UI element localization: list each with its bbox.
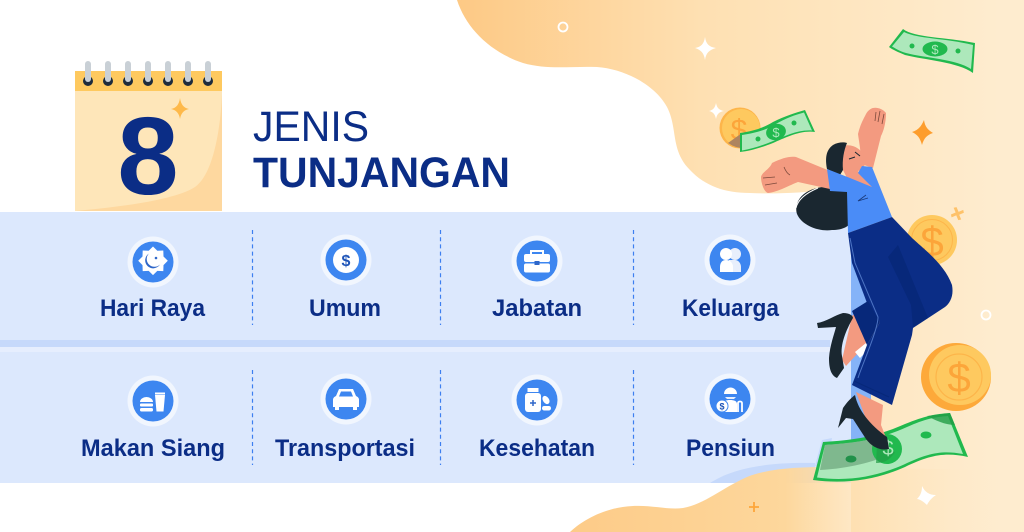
illustration: woman jumping xyxy=(761,108,953,450)
illustration: large coin: $ xyxy=(947,354,971,401)
number 8: 8 xyxy=(117,95,179,218)
item: Makan Siang: Makan Siang xyxy=(81,435,225,462)
front foot xyxy=(856,392,887,440)
white lining xyxy=(855,343,870,358)
illustration: flying bill upper left: $ xyxy=(772,125,780,140)
background blob: top right xyxy=(457,0,1024,532)
rear calf of pants xyxy=(852,301,880,345)
calendar sparkle xyxy=(171,98,189,119)
item: Makan Siang xyxy=(81,376,225,462)
outstretched arm xyxy=(761,157,830,193)
illustration: banknote underfoot xyxy=(813,413,968,482)
item: Pensiun: Pensiun xyxy=(686,435,775,462)
illustration: coin middle right xyxy=(907,215,957,265)
item: Hari Raya xyxy=(100,236,206,322)
seam lines xyxy=(850,238,878,378)
front shoe xyxy=(838,395,889,450)
item: Transportasi: Transportasi xyxy=(275,435,415,462)
item: Umum xyxy=(309,234,381,322)
pocket band xyxy=(888,245,928,327)
illustration: coin upper left: $ xyxy=(731,114,748,147)
decorative rings and sparkles xyxy=(558,22,990,512)
item: Umum: $ xyxy=(342,253,351,270)
item: Hari Raya: Hari Raya xyxy=(100,295,206,322)
title xyxy=(253,103,510,197)
illustration: large coin xyxy=(921,343,991,411)
item: Kesehatan xyxy=(479,374,595,462)
title: JENIS xyxy=(253,103,369,151)
item: Jabatan: Jabatan xyxy=(492,295,582,322)
item: Pensiun: $ xyxy=(719,402,725,412)
item: Keluarga xyxy=(682,234,780,322)
illustration: coin middle right: $ xyxy=(920,218,944,265)
item: Umum: Umum xyxy=(309,295,381,322)
illustration: flying bill upper left xyxy=(740,110,815,152)
dashed dividers xyxy=(252,230,634,465)
pants and front leg xyxy=(848,217,953,405)
item: Pensiun xyxy=(686,374,775,462)
benefits panel xyxy=(0,212,871,483)
hair highlight xyxy=(796,188,818,208)
shirt xyxy=(827,166,892,233)
illustration: flying bill upper right: $ xyxy=(931,42,939,57)
face and neck xyxy=(842,145,873,188)
hair front xyxy=(826,142,847,175)
item: Jabatan xyxy=(492,236,582,322)
outstretched hand lines xyxy=(763,167,790,185)
hem line xyxy=(854,381,889,397)
raised hand fingers xyxy=(875,111,884,124)
rear shoe xyxy=(817,313,853,378)
item: Transportasi xyxy=(275,374,415,462)
illustration: banknote underfoot: $ xyxy=(882,438,894,460)
shirt crease xyxy=(858,195,868,201)
hair back xyxy=(796,187,850,230)
raised arm xyxy=(858,108,886,168)
illustration: flying bill upper right xyxy=(889,29,975,73)
background blob: bottom xyxy=(570,467,1000,532)
illustration: coin upper left xyxy=(720,108,760,148)
calendar icon xyxy=(75,61,222,218)
item: Kesehatan: Kesehatan xyxy=(479,435,595,462)
title: TUNJANGAN xyxy=(253,150,510,197)
item: Keluarga: Keluarga xyxy=(682,295,780,322)
rear leg skin xyxy=(842,310,868,366)
facial features xyxy=(849,152,860,159)
